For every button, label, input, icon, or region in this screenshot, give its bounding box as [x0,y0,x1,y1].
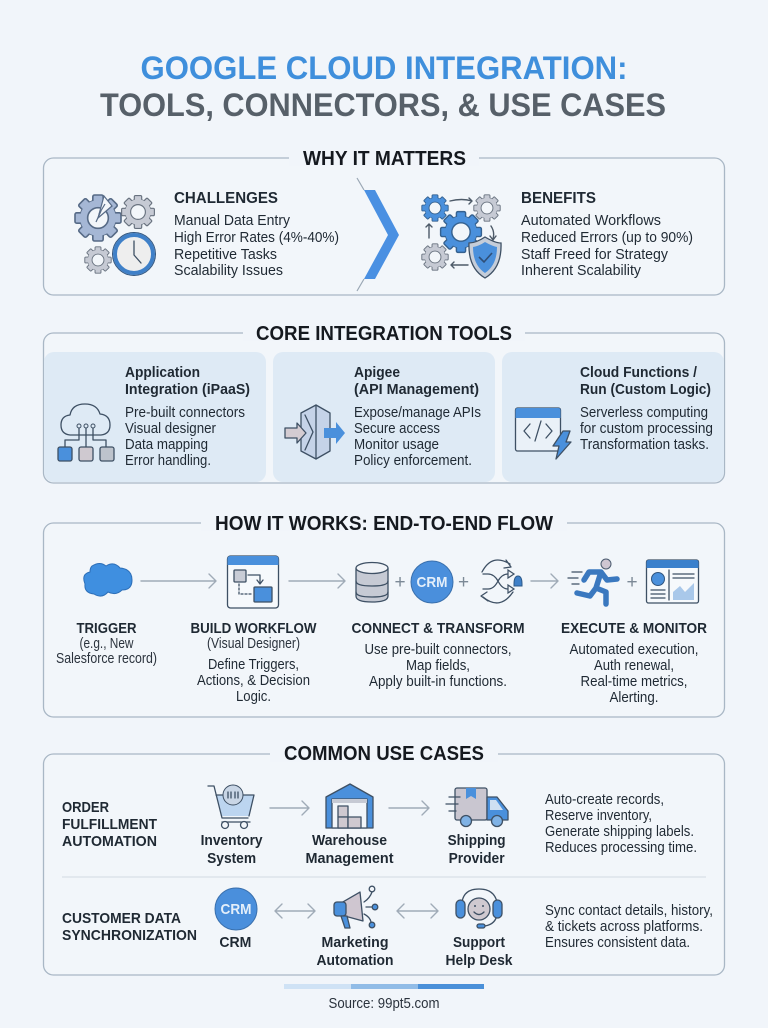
text: challenges: Scalability Issues [174,262,283,279]
text: order description: Auto-create records, [545,791,664,808]
text: benefits: Automated Workflows [521,212,661,229]
text: apigee: Policy enforcement. [354,452,472,469]
icon: support headset [456,889,502,928]
row label: customer data synchronization: SYNCHRONIZATION [62,927,197,944]
text: connect and transform: Map fields, [406,657,470,674]
text: connect and transform [352,620,524,690]
text: order description: Reserve inventory, [545,807,652,824]
text: apigee: Monitor usage [354,436,439,453]
text: customer description: Sync contact details, history, [545,902,713,919]
icon: workflow window [228,556,278,608]
text: application integration: Pre-built connectors [125,404,245,421]
text: build workflow: Actions, & Decision [197,672,310,689]
text: warehouse management: Management [306,850,394,867]
text: apigee [354,364,481,469]
panel: why it matters [44,147,724,295]
text: execute and monitor [561,620,707,706]
text: support help desk: Support [453,934,505,951]
text: order description: Generate shipping labels. [545,823,694,840]
text: apigee: Apigee [354,364,400,381]
text: build workflow: (Visual Designer) [207,636,300,652]
text: crm: CRM [219,934,251,951]
text: connect and transform: Apply built-in functions. [369,673,507,690]
card: cloud functions [502,352,724,482]
text: order description [545,791,697,856]
text: execute and monitor: Real-time metrics, [580,673,688,690]
text: connect and transform: Use pre-built connectors, [364,641,512,658]
heading: common use cases: COMMON USE CASES [284,742,484,765]
icon: shopping cart [208,785,254,828]
text: shipping provider: Shipping [448,832,506,849]
icon: crm circle [215,888,257,930]
title: TOOLS, CONNECTORS, & USE CASES [100,87,666,123]
text: trigger: TRIGGER [76,620,137,637]
heading: core integration tools: CORE INTEGRATION TOOLS [256,322,512,345]
text: cloud functions: Transformation tasks. [580,436,709,453]
text: build workflow: Logic. [236,688,271,705]
icon: delivery truck [446,788,508,826]
plus: + [394,572,406,593]
text: execute and monitor: Automated execution, [570,641,698,658]
panel: core integration tools [44,322,724,483]
text: trigger [56,620,157,667]
text: challenges: Manual Data Entry [174,212,290,229]
card: application integration [44,352,266,482]
row label: order fulfillment [62,799,157,850]
text: challenges: CHALLENGES [174,190,278,207]
row label: customer data synchronization: CUSTOMER DATA [62,910,181,927]
text: application integration: Integration (iPaaS) [125,381,250,398]
text: inventory system: System [207,850,256,867]
plus: + [458,572,469,593]
icon: dashboard window [646,560,698,603]
icon: crm circle: CRM [416,574,448,591]
text: customer description: & tickets across platforms. [545,918,703,935]
text: support help desk [446,934,513,969]
icon: crm circle: CRM [220,901,252,918]
text: application integration [125,364,250,469]
plus: + [626,572,638,593]
arrow: inventory to warehouse [270,801,309,815]
text: benefits [521,190,693,279]
text: challenges: Repetitive Tasks [174,246,277,263]
text: warehouse management: Warehouse [312,832,387,849]
title [100,50,666,123]
text: warehouse management [306,832,394,867]
text: benefits: Reduced Errors (up to 90%) [521,229,693,246]
text: application integration: Error handling. [125,452,211,469]
text: apigee: Secure access [354,420,440,437]
panel: common use cases [44,742,724,975]
text: shipping provider [448,832,506,867]
row label: order fulfillment: AUTOMATION [62,833,157,850]
text: inventory system [201,832,263,867]
row label: order fulfillment: ORDER [62,799,109,816]
text: trigger: (e.g., New [80,636,134,652]
text: trigger: Salesforce record) [56,651,157,667]
arrow: marketing to support [397,904,438,918]
text: inventory system: Inventory [201,832,263,849]
arrow: crm to marketing [275,904,315,918]
arrow: chevron [357,178,399,291]
text: cloud functions: for custom processing [580,420,713,437]
text: order description: Reduces processing time. [545,839,697,856]
title: GOOGLE CLOUD INTEGRATION: [140,50,628,86]
text: execute and monitor: Alerting. [610,689,658,706]
text: apigee: (API Management) [354,381,479,398]
text: customer description: Ensures consistent data. [545,934,690,951]
text: apigee: Expose/manage APIs [354,404,481,421]
text: marketing automation: Marketing [322,934,388,951]
text: execute and monitor: Auth renewal, [594,657,674,674]
icon: crm circle [411,561,453,603]
text: marketing automation [316,934,394,969]
text: benefits: Staff Freed for Strategy [521,246,668,263]
icon: automated gears and shield [422,195,501,278]
icon: megaphone [334,886,378,928]
heading: how it works: HOW IT WORKS: END-TO-END FLOW [215,512,554,535]
arrow: build to connect [289,574,345,588]
text: shipping provider: Provider [449,850,505,867]
heading: why it matters: WHY IT MATTERS [303,147,466,170]
source text: Source: 99pt5.com [328,996,440,1012]
text: challenges: High Error Rates (4%-40%) [174,229,339,246]
text: cloud functions: Cloud Functions / [580,364,698,381]
source colour bar [284,984,484,989]
arrow: warehouse to shipping [389,801,429,815]
icon: warehouse [326,784,373,828]
icon: api gateway [285,405,345,459]
text: cloud functions: Serverless computing [580,404,708,421]
icon: salesforce cloud [84,564,132,596]
text: marketing automation: Automation [316,952,394,969]
arrow: trigger to build [141,574,216,588]
text: customer description [545,902,713,951]
text: execute and monitor: EXECUTE & MONITOR [561,620,707,637]
text: application integration: Application [125,364,200,381]
row label: customer data synchronization [62,910,197,944]
text: cloud functions: Run (Custom Logic) [580,381,711,398]
icon: broken gears and clock [75,195,156,276]
text: connect and transform: CONNECT & TRANSFORM [352,620,524,637]
icon: transform shuffle [481,560,522,603]
icon: runner [568,559,617,604]
icon: database [356,562,388,602]
row label: order fulfillment: FULFILLMENT [62,816,157,833]
card: apigee [273,352,495,482]
text: application integration: Data mapping [125,436,208,453]
text: application integration: Visual designer [125,420,216,437]
icon: code window with lightning [516,408,571,459]
text: support help desk: Help Desk [446,952,513,969]
icon: cloud connectors [58,404,114,461]
text: benefits: Inherent Scalability [521,262,641,279]
text: cloud functions [580,364,713,453]
arrow: connect to execute [531,574,558,588]
text: build workflow: BUILD WORKFLOW [190,620,317,637]
text: build workflow: Define Triggers, [208,656,299,673]
text: build workflow [190,620,317,705]
text: challenges [174,190,339,279]
text: benefits: BENEFITS [521,190,596,207]
panel: how it works [44,512,724,717]
